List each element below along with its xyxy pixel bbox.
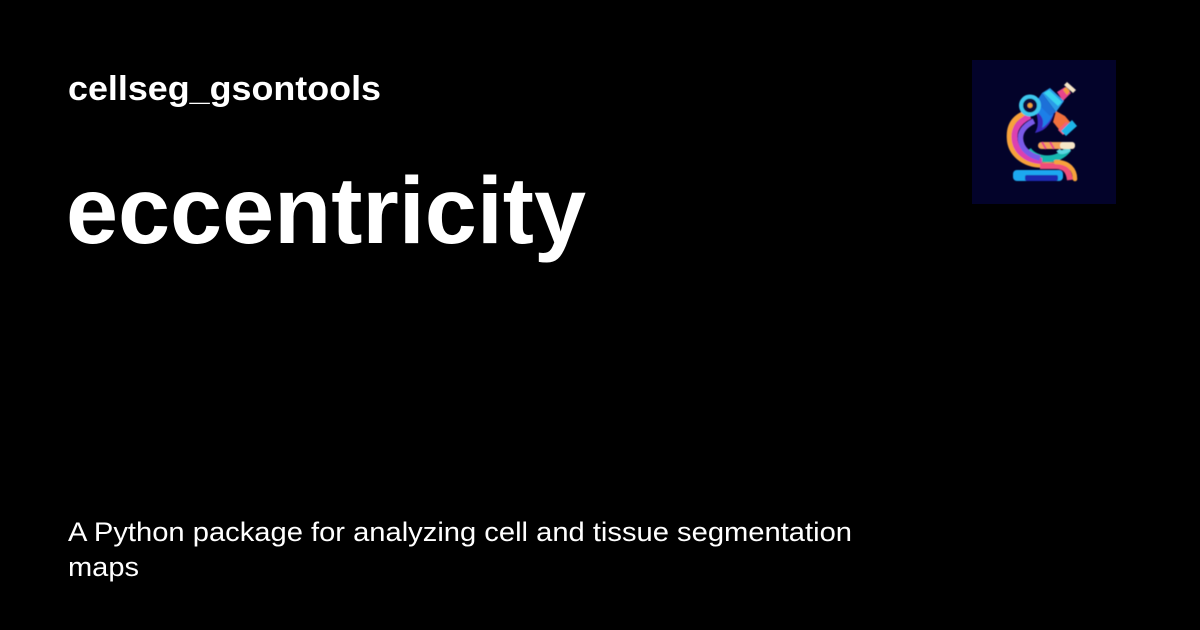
description [68, 517, 852, 582]
arm: magenta band [1014, 116, 1042, 161]
page title: eccentricity [66, 158, 586, 264]
arm: orange band [1009, 113, 1056, 165]
lower sweep [1040, 166, 1070, 180]
focus knob [1021, 96, 1039, 114]
description: A Python package for analyzing cell and tissue segmentation [68, 517, 852, 547]
scope head [1035, 108, 1054, 133]
base [1013, 170, 1063, 181]
objective lens [1053, 111, 1070, 132]
stage [1038, 142, 1075, 149]
arm: violet band [1020, 121, 1040, 158]
eyepiece tube [1057, 87, 1071, 101]
icon: microscope logo [972, 60, 1116, 204]
teal inner curve [1028, 149, 1068, 159]
description: maps [68, 552, 139, 582]
site name: cellseg_gsontools [68, 70, 381, 108]
